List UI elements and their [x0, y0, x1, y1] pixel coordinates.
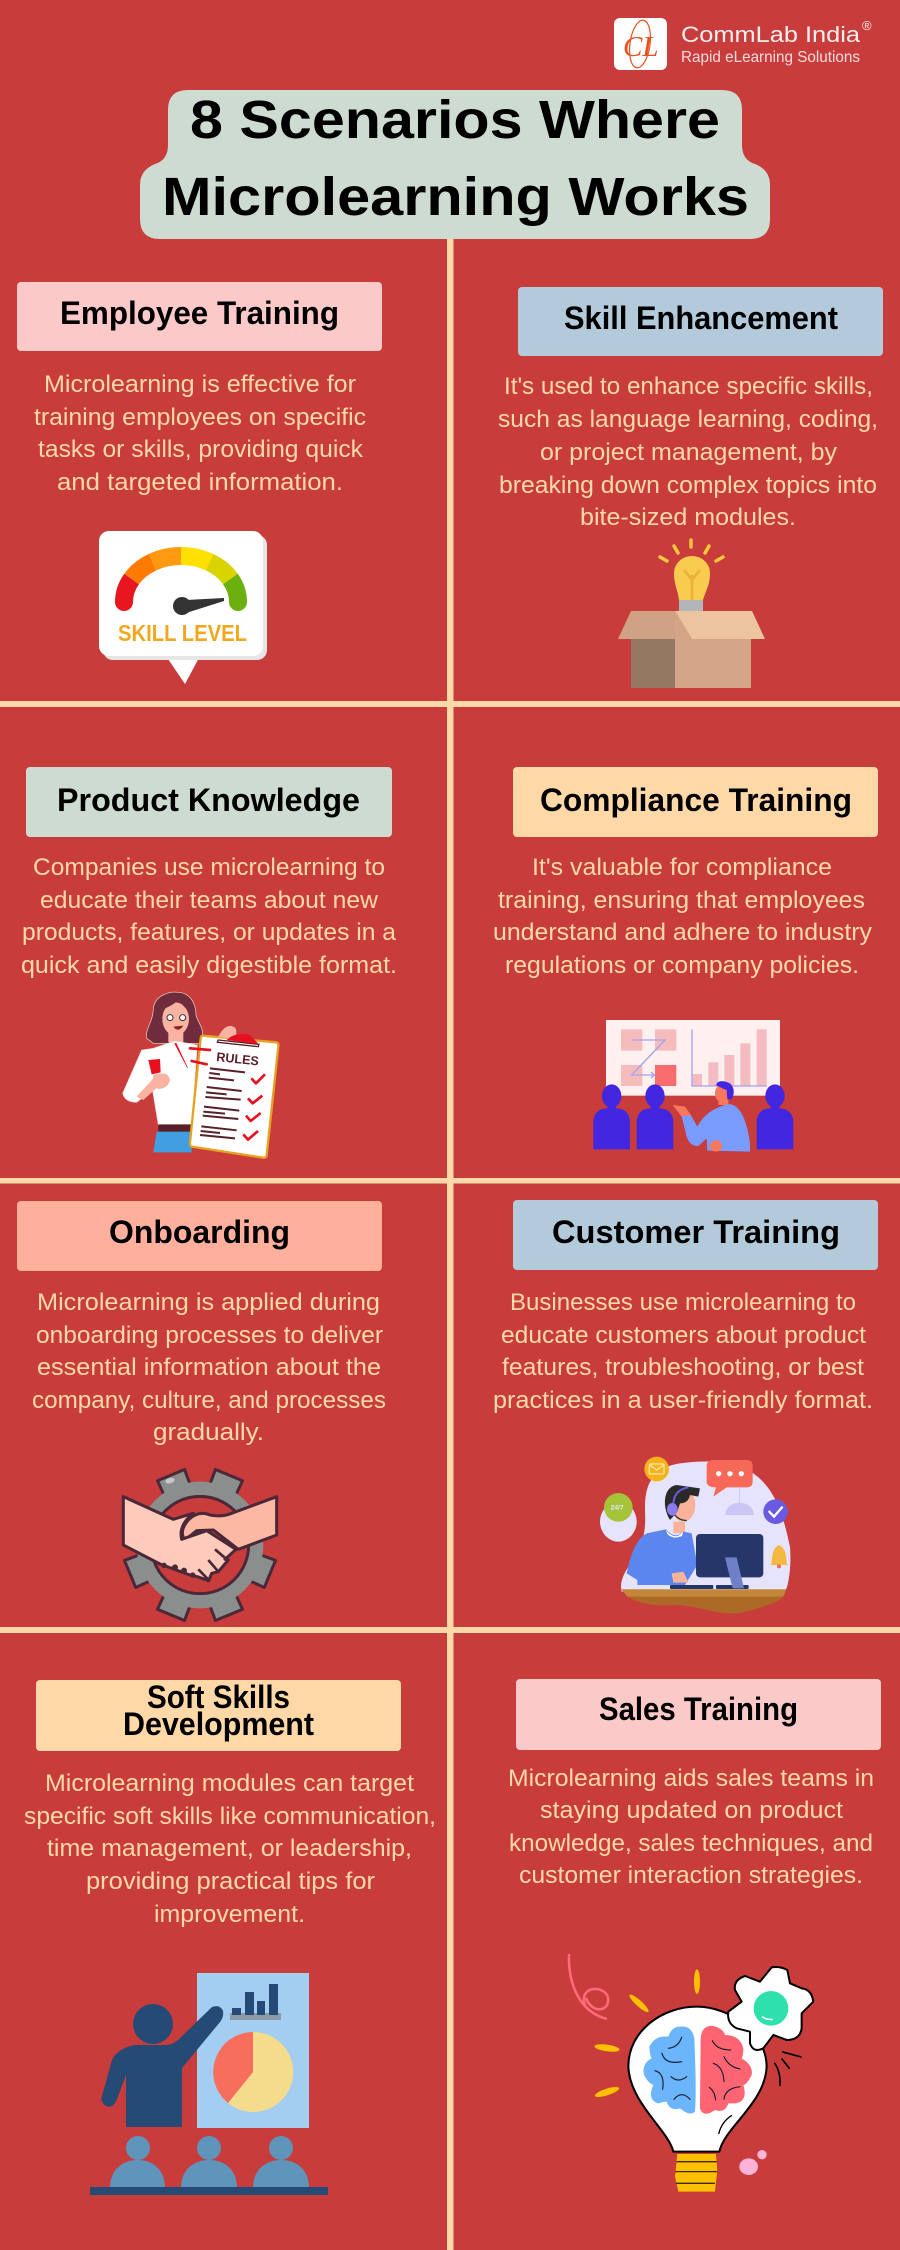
heading: employee training: Employee Training: [60, 295, 339, 331]
text: skill enhancement: It's used to enhance specific skills,: [504, 373, 873, 400]
text: onboarding: company, culture, and processes: [32, 1387, 386, 1414]
text: sales training: customer interaction strategies.: [519, 1862, 863, 1889]
panel: product knowledge: [21, 767, 397, 1158]
text: employee training: Microlearning is effective for: [44, 371, 356, 398]
text: customer training: [493, 1289, 873, 1414]
text: skill enhancement: bite-sized modules.: [580, 504, 796, 531]
text: onboarding: essential information about the: [37, 1354, 381, 1381]
text: skill enhancement: [498, 373, 878, 531]
text: skill enhancement: breaking down complex topics into: [499, 472, 877, 499]
heading: product knowledge: Product Knowledge: [57, 782, 360, 818]
panel: employee training: [17, 282, 382, 684]
icon: skill level gauge: [99, 531, 267, 684]
text: compliance training: [493, 854, 872, 979]
icon: presenter with pie chart: [90, 1973, 328, 2195]
title: Microlearning Works: [162, 167, 749, 227]
text: customer training: features, troubleshooting, or best: [502, 1354, 864, 1381]
text: product knowledge: Companies use microlearning to: [33, 854, 385, 881]
heading: customer training: [513, 1200, 878, 1270]
text: product knowledge: quick and easily digestible format.: [21, 952, 397, 979]
logo: CommLab India: CL: [623, 31, 658, 63]
text: soft skills development: providing practical tips for: [86, 1868, 375, 1895]
heading: soft skills development: [36, 1679, 401, 1751]
heading: skill enhancement: Skill Enhancement: [564, 300, 838, 336]
text: product knowledge: educate their teams about new: [40, 887, 379, 914]
text: customer training: Businesses use microlearning to: [510, 1289, 856, 1316]
heading: skill enhancement: [518, 287, 883, 356]
text: employee training: and targeted information.: [57, 469, 343, 496]
heading: onboarding: Onboarding: [109, 1214, 290, 1250]
text: product knowledge: products, features, or updates in a: [22, 919, 397, 946]
title: [140, 90, 770, 239]
logo: CommLab India: Rapid eLearning Solutions: [681, 49, 860, 66]
icon: customer support agent: [600, 1457, 790, 1614]
text: customer training: educate customers about product: [501, 1322, 866, 1349]
icon: presentation with audience: [593, 1020, 793, 1152]
text: onboarding: onboarding processes to deliver: [36, 1322, 383, 1349]
panel: compliance training: [493, 767, 878, 1152]
heading: compliance training: [513, 767, 878, 837]
logo: CommLab India: CommLab India: [681, 22, 861, 47]
text: onboarding: gradually.: [153, 1419, 264, 1446]
heading: sales training: Sales Training: [599, 1691, 798, 1727]
icon: light bulb with brain and gear: [569, 1954, 813, 2192]
panel: soft skills development: [24, 1679, 436, 2195]
text: onboarding: Microlearning is applied during: [37, 1289, 380, 1316]
text: employee training: [34, 371, 366, 496]
panel: skill enhancement: [498, 287, 883, 688]
text: soft skills development: time management, or leadership,: [47, 1835, 412, 1862]
heading: compliance training: Compliance Training: [540, 782, 852, 818]
text: compliance training: regulations or company policies.: [505, 952, 859, 979]
text: employee training: tasks or skills, providing quick: [38, 436, 364, 463]
heading: customer training: Customer Training: [552, 1214, 840, 1250]
text: soft skills development: [24, 1770, 436, 1928]
text: compliance training: It's valuable for compliance: [532, 854, 832, 881]
icon: light bulb in box: [618, 540, 765, 688]
icon: customer support agent: 24/7: [611, 1504, 624, 1511]
text: soft skills development: improvement.: [154, 1901, 305, 1928]
text: skill enhancement: or project management, by: [540, 439, 837, 466]
logo: CommLab India: [614, 18, 872, 70]
heading: product knowledge: [26, 767, 392, 837]
text: employee training: training employees on specific: [34, 404, 366, 431]
text: onboarding: [32, 1289, 386, 1446]
heading: sales training: [516, 1679, 881, 1750]
icon: woman with rules clipboard: RULES: [216, 1050, 260, 1068]
text: compliance training: training, ensuring that employees: [498, 887, 865, 914]
text: compliance training: understand and adhere to industry: [493, 919, 872, 946]
text: product knowledge: [21, 854, 397, 979]
heading: soft skills development: Soft Skills: [147, 1679, 290, 1715]
icon: handshake over gear: [123, 1469, 277, 1621]
text: soft skills development: Microlearning modules can target: [45, 1770, 414, 1797]
icon: skill level gauge: SKILL LEVEL: [118, 620, 247, 646]
text: sales training: Microlearning aids sales teams in: [508, 1765, 874, 1792]
text: sales training: [508, 1765, 874, 1889]
panel: onboarding: [17, 1201, 386, 1621]
panel: customer training: [493, 1200, 878, 1614]
icon: woman with rules clipboard: [123, 992, 278, 1158]
heading: onboarding: [17, 1201, 382, 1271]
logo: CommLab India: ®: [862, 18, 872, 33]
panel: sales training: [508, 1679, 881, 2192]
title: 8 Scenarios Where: [190, 90, 720, 150]
text: skill enhancement: such as language learning, coding,: [498, 406, 878, 433]
heading: employee training: [17, 282, 382, 351]
heading: soft skills development: Development: [123, 1706, 314, 1742]
text: soft skills development: specific soft skills like communication,: [24, 1803, 436, 1830]
text: customer training: practices in a user-friendly format.: [493, 1387, 873, 1414]
text: sales training: staying updated on product: [540, 1797, 843, 1824]
text: sales training: knowledge, sales techniques, and: [509, 1830, 873, 1857]
